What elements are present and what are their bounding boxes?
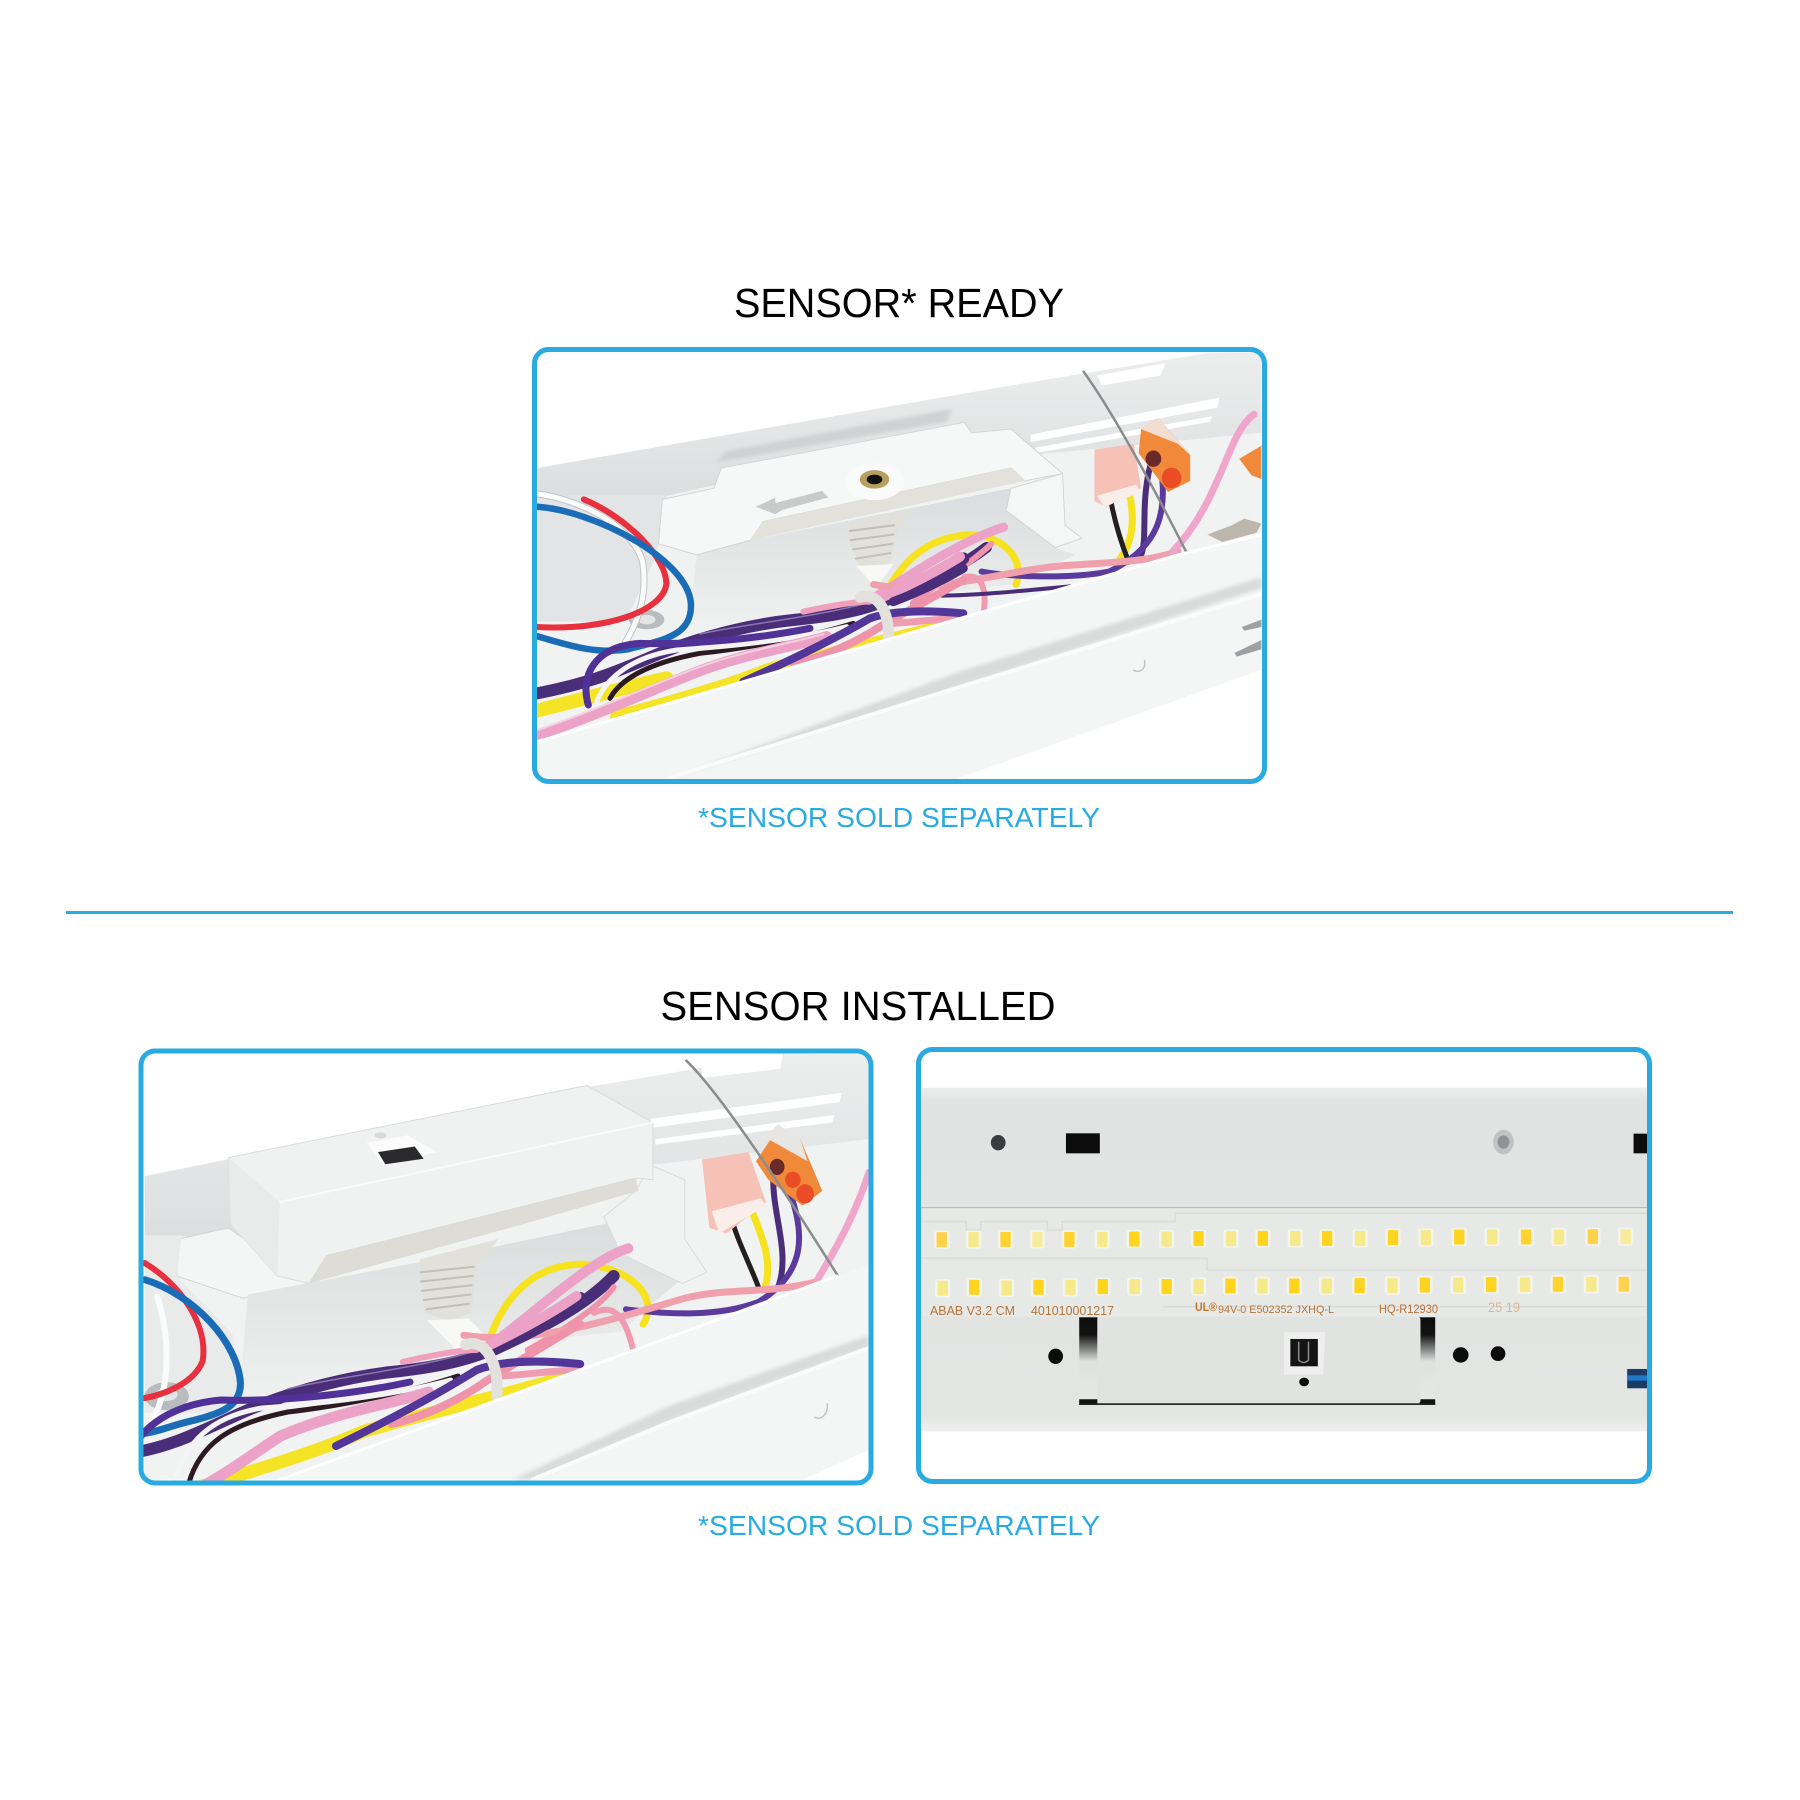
arrow mark [756,491,828,514]
wire highlight [1627,1375,1648,1381]
white corner [957,670,1261,779]
rail shadow [716,409,952,462]
upper square slot [1066,1133,1100,1153]
screw [145,1382,189,1410]
salmon wires [464,1172,869,1350]
keyhole slot [1207,519,1261,542]
bracket leg [604,1165,707,1283]
cable tie [860,596,888,640]
suspension cable [1084,372,1188,555]
wire slot [1627,1369,1648,1388]
back rail [144,1083,868,1236]
plastic stud [420,1239,498,1350]
loose wires [145,1263,240,1433]
front wall shadow [513,1335,869,1480]
fixture body [921,1088,1648,1432]
recess slot right [1419,1317,1435,1405]
lower holes [1048,1346,1505,1364]
sensor cover [1097,1317,1420,1403]
rail slots [650,1054,842,1145]
divider line [66,911,1733,914]
rail slots [1031,363,1220,453]
sensor glyph [1299,1342,1309,1362]
LED row two [936,1276,1630,1297]
board trace lines [921,1213,1648,1307]
suspension cable [686,1061,838,1276]
upper mount hole [991,1135,1006,1150]
threaded hole [860,470,900,500]
front wall top edge [280,1276,837,1480]
bracket plate [176,1228,248,1299]
sensor window [1290,1339,1318,1366]
fixture body [537,433,1262,734]
front wall [612,554,1189,724]
board print: rating: 94V-0 E502352 JXHQ-L [1218,1304,1334,1316]
sensor pinhole [1299,1378,1309,1386]
panel border [918,1050,1650,1482]
caption: sensor sold separately: *SENSOR SOLD SEPARATELY [698,1510,1100,1541]
lower bundle [523,557,963,740]
panel: sensor ready photo [523,350,1264,782]
bracket fold [751,468,1025,540]
plastic stud [849,524,901,582]
top board edge [921,1207,1648,1209]
salmon wires [874,414,1254,610]
yellow loop [888,535,1018,588]
front wall crease [533,1348,869,1480]
board print: ABAB: ABAB V3.2 CM [930,1303,1015,1318]
front wall shadow [719,578,1262,760]
bracket right leg [1006,474,1082,548]
front wall crease [674,609,1207,778]
sensor window [367,1132,437,1165]
yellow loop [491,1264,648,1335]
small dimple [1134,660,1145,671]
recess slot left [1079,1317,1097,1405]
wire connectors [1094,418,1261,507]
front wall top edge [537,535,1261,742]
panel border [534,350,1264,782]
lower bundle [125,1296,580,1500]
board print: part number: 401010001217 [1031,1303,1114,1318]
rivet [1493,1130,1514,1154]
panel border [141,1051,871,1483]
left floor [537,496,667,622]
board print: date: 25 19 [1488,1299,1520,1315]
upper bundle [877,527,1004,603]
upper bundle [488,1248,628,1350]
LED row one [935,1228,1632,1248]
mounting screw [629,610,664,629]
sensor body [228,1085,653,1283]
upper wires behind connectors [626,1180,799,1313]
board print: HQ: HQ-R12930 [1379,1302,1438,1316]
caption: sensor sold separately: *SENSOR SOLD SEPARATELY [698,802,1100,833]
recess bottom [1079,1403,1435,1405]
bracket interior [244,1224,678,1346]
back rail [537,377,1262,496]
front wall [280,1265,869,1480]
loose wires [537,494,691,651]
bracket top [658,422,1063,555]
heading: sensor installed: SENSOR INSTALLED [660,983,1056,1029]
right edge slot [1634,1134,1648,1153]
upper wires behind connectors [982,455,1163,576]
LED board [921,1208,1648,1317]
bracket interior [694,488,1074,584]
front wall slots [1234,620,1261,657]
heading: sensor ready: SENSOR* READY [734,280,1064,326]
sensor bezel [1284,1332,1325,1375]
cable tie [466,1344,497,1396]
small dimple [815,1404,827,1418]
panel: LED underside photo [918,1050,1650,1482]
fixture body [145,1054,869,1480]
bracket left leg [654,544,660,561]
white corner [803,1450,869,1480]
left floor [168,1236,182,1276]
wire connectors [702,1124,822,1233]
panel: installed sensor photo [125,1051,871,1500]
board print: UL mark: UL® [1195,1300,1217,1314]
